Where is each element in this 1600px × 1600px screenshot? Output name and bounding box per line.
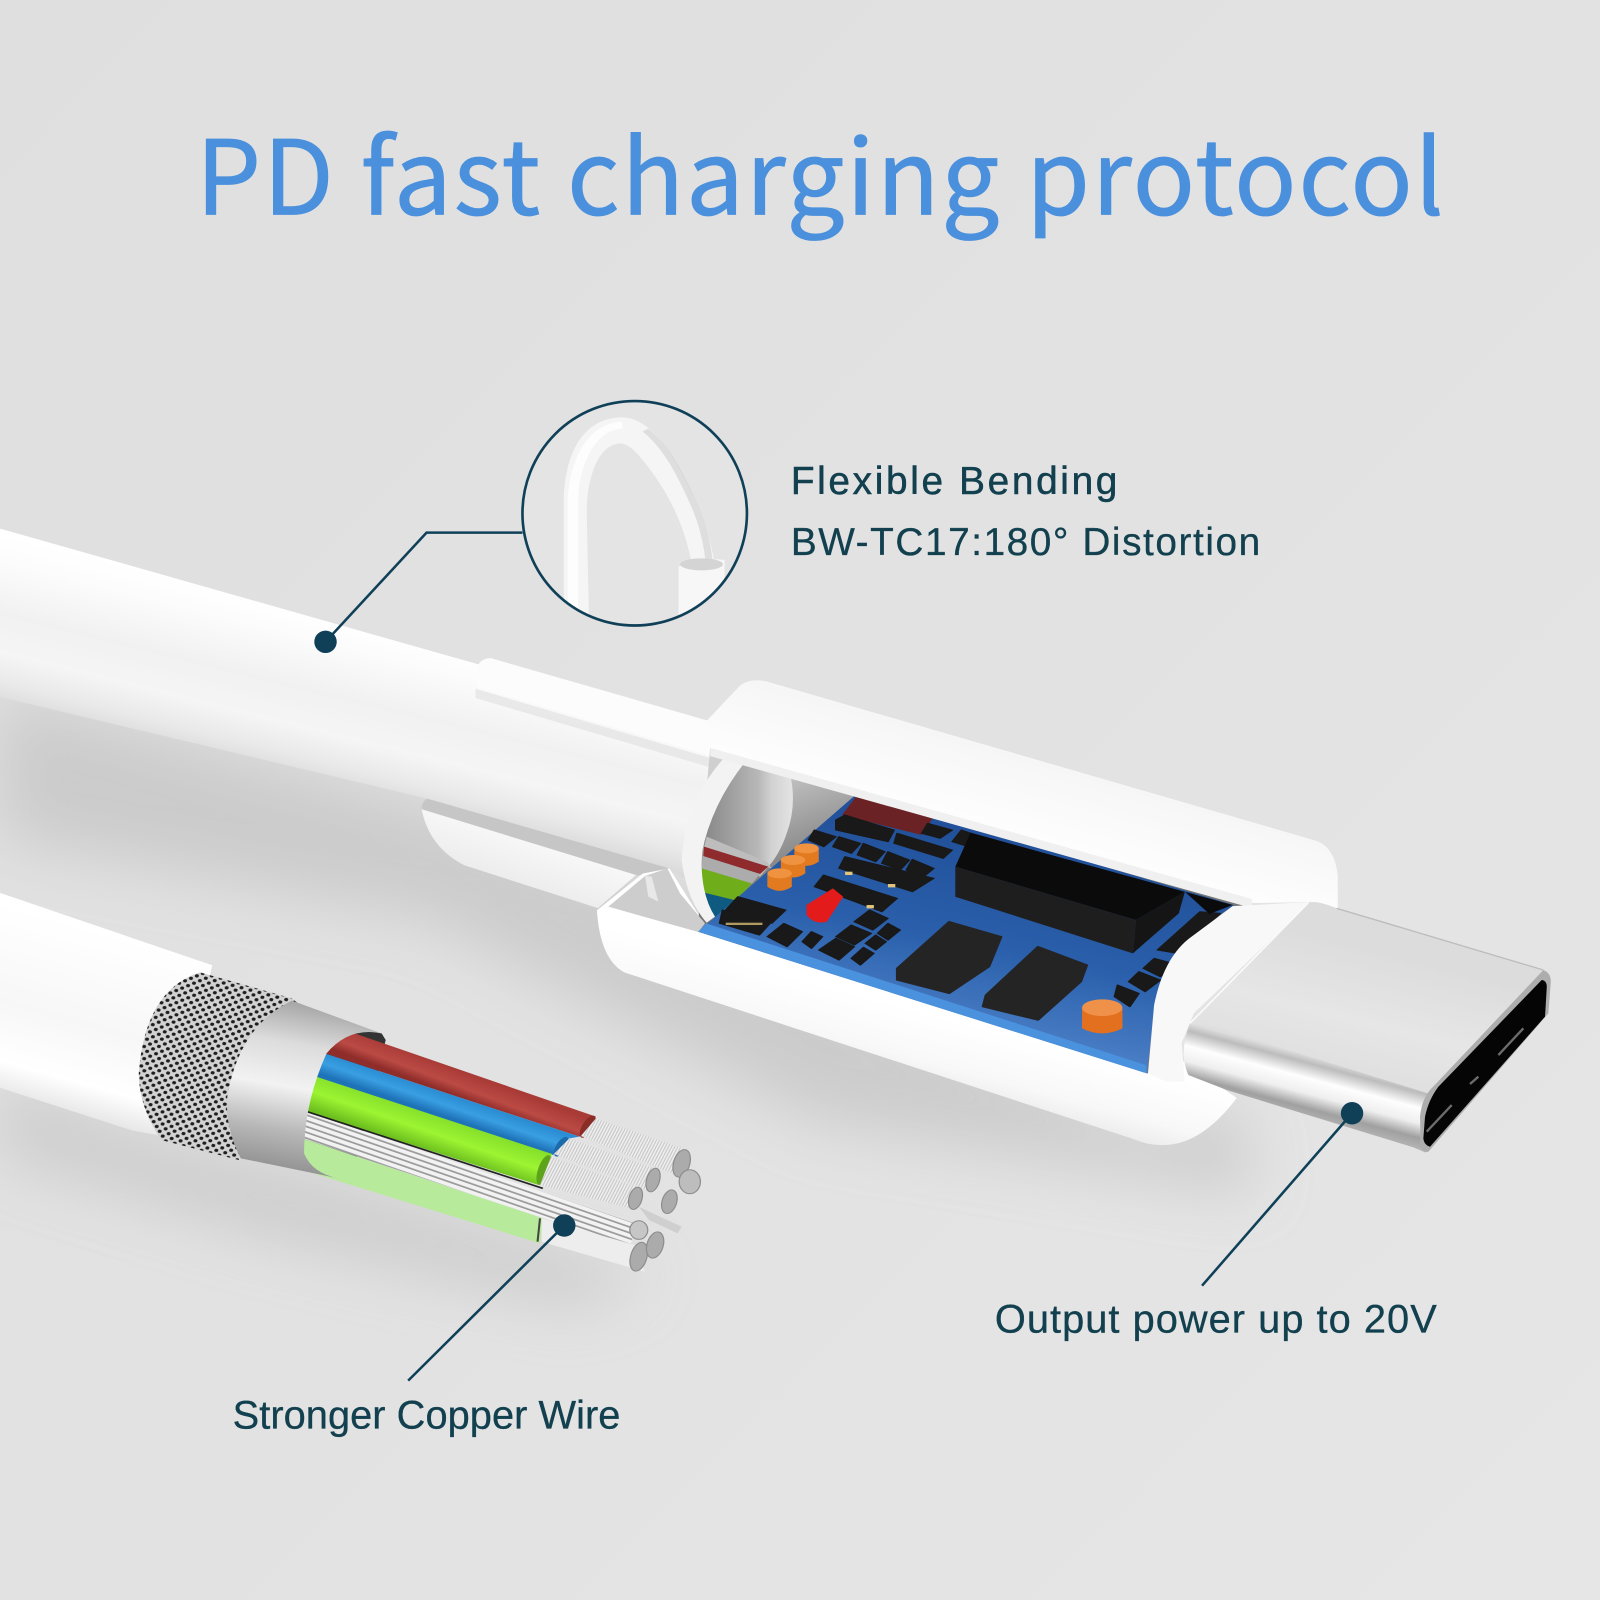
green wire xyxy=(292,1070,552,1185)
housing lid xyxy=(707,680,1338,908)
silver ring xyxy=(227,1001,382,1178)
right wall xyxy=(1148,902,1310,1082)
title: PD fast charging protocol xyxy=(196,94,1444,244)
lower cable body xyxy=(0,893,212,1138)
big black chip xyxy=(955,833,1233,953)
ring interior xyxy=(304,1031,386,1178)
dot and leader: copper wire xyxy=(408,1214,576,1381)
blue wire xyxy=(296,1047,580,1155)
gray disc xyxy=(703,760,793,877)
red wire xyxy=(304,1030,596,1137)
wire end caps xyxy=(533,1114,599,1186)
red LED xyxy=(807,888,843,923)
gold pads xyxy=(726,872,895,925)
dot: cable xyxy=(314,631,337,653)
white ring xyxy=(682,755,747,923)
strand ends xyxy=(626,1148,700,1272)
circuit board and components xyxy=(698,793,1234,1073)
top tab xyxy=(476,658,714,767)
cut wires xyxy=(703,847,768,874)
upper cable and connector xyxy=(0,529,1551,1153)
infographic canvas xyxy=(0,130,1551,1438)
orange capacitors xyxy=(767,843,1122,1033)
stripped cable with wires xyxy=(0,893,700,1381)
lower shell piece xyxy=(421,798,669,908)
flexible bending callout xyxy=(314,401,747,653)
leader line: bending xyxy=(326,533,522,642)
label: flexible bending: Flexible Bending xyxy=(791,460,1117,503)
label: distortion: BW-TC17:180° Distortion xyxy=(791,521,1260,564)
IC chips xyxy=(897,922,1087,1020)
internal cavity xyxy=(698,748,1252,1073)
dark red component xyxy=(842,795,934,835)
icon: bent cable in circle xyxy=(522,401,747,633)
plug opening xyxy=(1423,980,1547,1147)
lower tray xyxy=(597,868,1237,1145)
plug rim xyxy=(1420,970,1551,1152)
cable body xyxy=(0,529,714,898)
tray inner wall xyxy=(608,868,705,932)
circuit board xyxy=(698,793,1234,1073)
metal mesh braid xyxy=(139,972,300,1160)
USB-C metal plug xyxy=(1184,902,1551,1153)
plug lower band xyxy=(1184,1023,1428,1153)
copper strands xyxy=(581,1118,688,1175)
dot and leader: output power xyxy=(1202,1102,1363,1286)
contacts xyxy=(1427,1028,1523,1132)
small black components xyxy=(720,815,1220,1007)
cable end: ring, disc and wires xyxy=(608,755,793,932)
plug top surface xyxy=(1190,902,1551,1093)
label: output power: Output power up to 20V xyxy=(995,1298,1437,1342)
pale green wire xyxy=(292,1135,543,1243)
bare strand bundle xyxy=(292,1107,635,1247)
label: copper wire: Stronger Copper Wire xyxy=(233,1394,620,1438)
